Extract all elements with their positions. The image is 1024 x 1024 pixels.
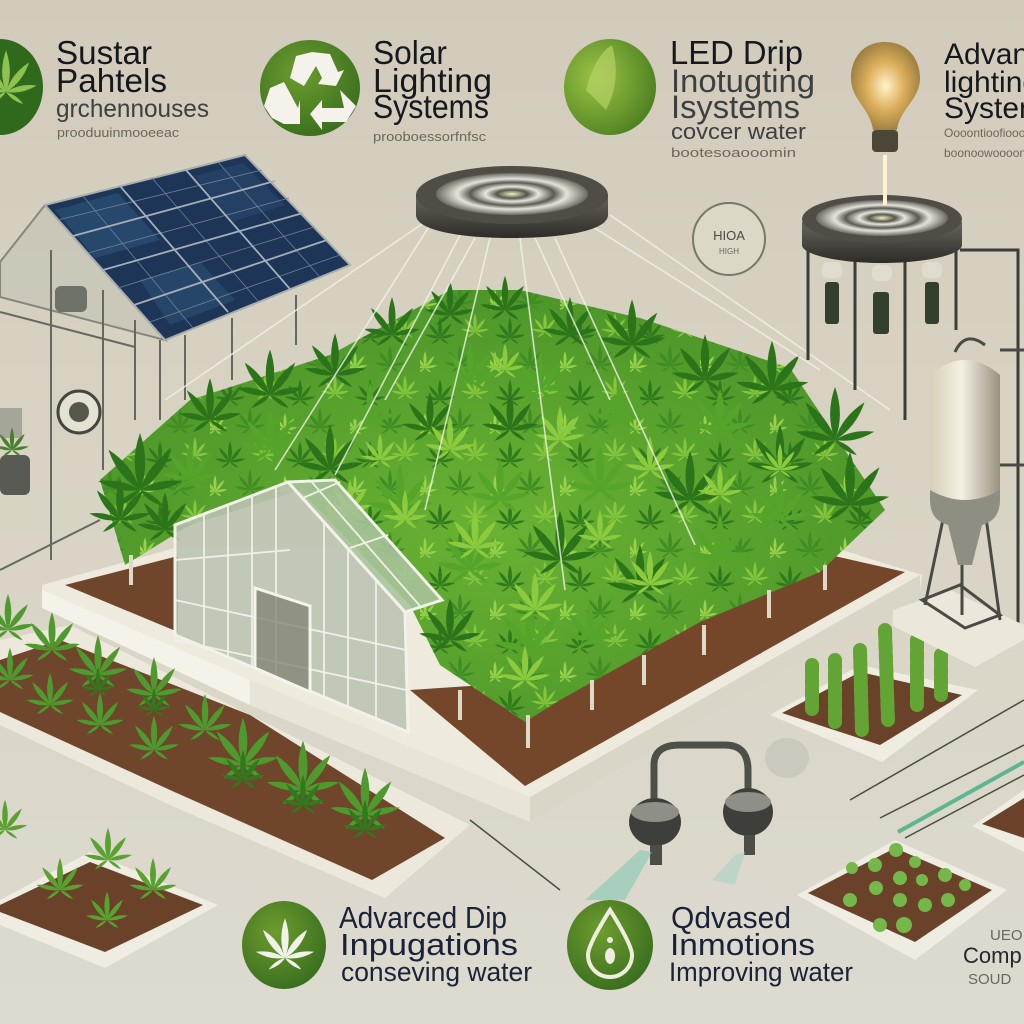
- drip irrigation connectors: [585, 738, 809, 900]
- top item 2 text: [373, 34, 492, 144]
- light rays: [165, 215, 890, 590]
- bottom item 2 text: Inmotions: [670, 927, 815, 962]
- pod tray: [797, 840, 1007, 960]
- bottom item 3 text: SOUD: [968, 971, 1012, 988]
- bottom item 2: water drop icon: [567, 900, 653, 990]
- top item 4 text: Oooontioofiooo: [944, 126, 1024, 140]
- bright leaves: [327, 343, 800, 691]
- water tank: [922, 339, 1024, 628]
- white plinth: [893, 590, 1024, 667]
- top item 2 text: prooboessorfnfsc: [373, 129, 487, 144]
- top item 4: light bulb icon: [851, 42, 920, 152]
- right lamp unit: [802, 155, 1018, 630]
- top item 3 text: covcer water: [671, 119, 806, 144]
- bottom item 3 text: Comp: [963, 943, 1022, 968]
- bottom item 1 text: [339, 900, 532, 987]
- top item 1 text: grchennouses: [56, 95, 209, 123]
- main raised planting bed: [42, 540, 922, 822]
- bottom item 1 text: Inpugations: [340, 927, 518, 962]
- top item 1 text: prooduuinmooeeac: [57, 125, 180, 140]
- top item 4 text: boonoowoooon: [944, 146, 1024, 160]
- bottom item 1 text: conseving water: [341, 957, 532, 987]
- top item 1 text: Pahtels: [56, 62, 167, 99]
- solar panels: [45, 155, 350, 340]
- HIOA badge: HIGH: [719, 247, 739, 256]
- bottom item 2 text: [669, 900, 853, 987]
- bottom item 2 text: Improving water: [669, 957, 853, 987]
- top item 2: recycle icon: [260, 40, 360, 136]
- top item 3 text: Inotugting: [671, 63, 815, 99]
- top item 1 text: [56, 34, 209, 140]
- right seedling bed: [770, 630, 978, 762]
- left wall meters and pot: [0, 286, 100, 495]
- top item 3 text: Isystems: [671, 89, 800, 125]
- top item 2 text: Lighting: [373, 62, 492, 99]
- top item 1: plant icon: [0, 39, 43, 135]
- lower left seedling bed: [0, 800, 218, 968]
- bottom item 2 text: Qdvased: [671, 900, 791, 935]
- plant stems: [131, 555, 825, 748]
- bottom item 3 text: UEO: [990, 927, 1023, 944]
- top item 1 text: Sustar: [56, 34, 152, 71]
- top item 3: leaf orb icon: [564, 39, 656, 135]
- central LED lamp: [416, 166, 608, 238]
- HIOA badge: HIOA: [713, 228, 745, 243]
- solar panel greenhouse frame: [0, 205, 296, 570]
- dark leaves: [89, 276, 890, 654]
- top item 3 text: [670, 34, 815, 160]
- greenhouse: [175, 480, 442, 732]
- top item 3 text: bootesoaooomin: [671, 145, 796, 160]
- centre foliage: [89, 276, 890, 748]
- bottom item 1 text: Advarced Dip: [339, 900, 507, 935]
- top item 4 text: [944, 38, 1024, 160]
- top item 3 text: LED Drip: [670, 34, 803, 71]
- HIOA badge: [693, 203, 765, 275]
- bottom item 1: cannabis leaf icon: [242, 901, 326, 989]
- top item 2 text: Solar: [373, 34, 447, 71]
- bottom item 3 text: [963, 927, 1023, 988]
- mid leaves: [162, 342, 811, 666]
- far right bed and pipes: [470, 700, 1024, 890]
- left seedling bed: [0, 594, 470, 898]
- top item 2 text: Systems: [373, 88, 489, 125]
